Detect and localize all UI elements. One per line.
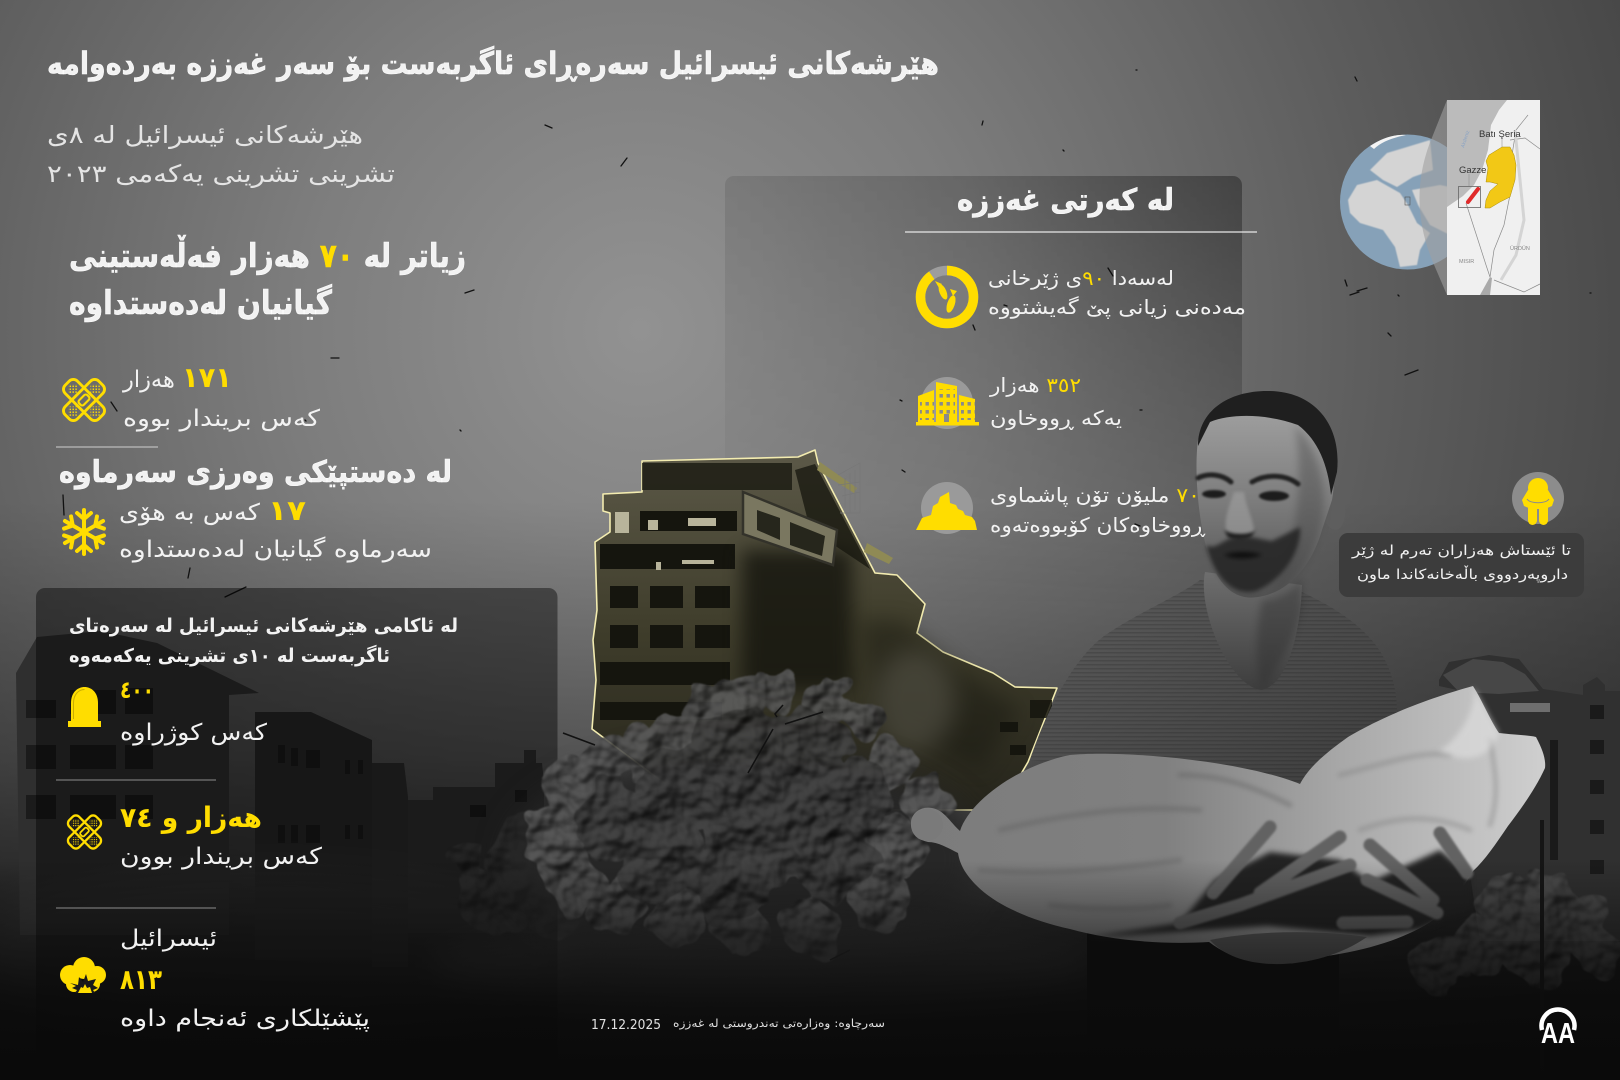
title: هێرشەکانی ئیسرائیل سەرەڕای ئاگربەست بۆ سەر غەززە بەردەوامە bbox=[47, 45, 939, 82]
subtitle bbox=[47, 121, 395, 188]
stat: 813 violations: پێشێلکاری ئەنجام داوە bbox=[120, 1006, 370, 1032]
panel: Gaza Strip bbox=[725, 176, 1242, 494]
stat: 17 deaths from cold: سەرماوە گیانیان لەدەستداوە bbox=[119, 536, 432, 563]
inset map bbox=[1447, 100, 1540, 295]
footer date: 17.12.2025 bbox=[591, 1017, 661, 1033]
heading: deaths bbox=[69, 235, 466, 323]
stat: 400 killed bbox=[68, 676, 267, 746]
distant smoke bbox=[1412, 868, 1620, 993]
shirt bbox=[1030, 580, 1397, 795]
stat: 1074 wounded: کەس بریندار بوون bbox=[120, 844, 322, 870]
icon: buildings bbox=[916, 377, 979, 429]
ground fog bbox=[430, 920, 1090, 1010]
subtitle: هێرشەکانی ئیسرائیل لە ٨ی bbox=[47, 121, 363, 149]
globe bbox=[1340, 134, 1475, 270]
heading: Gaza Strip: لە کەرتی غەززە bbox=[957, 183, 1174, 218]
stat: 17 deaths from cold bbox=[61, 494, 432, 563]
bottom ground darkening bbox=[0, 860, 1620, 1080]
debris in cloud bbox=[563, 705, 850, 960]
map labels: Akdeniz bbox=[1460, 129, 1472, 149]
face bbox=[1196, 402, 1334, 598]
stat: 400 killed: کەس کوژراوە bbox=[120, 720, 267, 746]
ruined building on the right bbox=[1412, 655, 1620, 1080]
panel: Israeli attacks since ceasefire bbox=[36, 588, 558, 1080]
logo: AA bbox=[1541, 1009, 1575, 1050]
stat: wounded 171 thousand: کەس بریندار بووە bbox=[123, 406, 320, 432]
icon: bandage bbox=[61, 377, 107, 423]
stat: 813 violations bbox=[60, 926, 370, 1032]
brows and eyes bbox=[1198, 475, 1298, 501]
stat: 90 percent infrastructure bbox=[920, 266, 1246, 324]
man holding shroud bbox=[911, 391, 1545, 1080]
icon: bandage small bbox=[66, 814, 103, 850]
beard and mouth bbox=[1206, 527, 1300, 592]
subtitle: تشرینی تشرینی یەکەمی ٢٠٢٣ bbox=[47, 160, 395, 188]
icon: explosion cloud bbox=[60, 957, 106, 993]
map labels: Batı Şeria bbox=[1479, 129, 1521, 140]
west bank bbox=[1485, 147, 1516, 208]
stat: 352 thousand units bbox=[916, 373, 1122, 430]
icon: rubble bbox=[916, 482, 977, 534]
shroud bbox=[911, 686, 1545, 962]
stat: 1074 wounded: هەزار و ٧٤ bbox=[120, 801, 262, 834]
heading: start of winter: لە دەستپێکی وەرزی سەرماوە bbox=[59, 455, 452, 490]
callout: bodies under rubble bbox=[1339, 533, 1584, 597]
stat: 17 deaths from cold: ١٧ کەس بە هۆی bbox=[119, 494, 306, 527]
ear bbox=[1318, 483, 1348, 531]
nose bbox=[1224, 492, 1256, 539]
hair bbox=[1198, 391, 1338, 495]
icon: snowflake bbox=[61, 510, 107, 554]
stat: 352 thousand units: ٣٥٢ هەزار bbox=[989, 373, 1081, 397]
funnel bbox=[1419, 100, 1447, 295]
map labels: Gazze bbox=[1459, 165, 1486, 176]
stat: 400 killed: ٤٠٠ bbox=[120, 676, 154, 704]
hands bbox=[1085, 827, 1470, 938]
panel heading: since ceasefire: لە ئاکامی هێرشەکانی ئیسرائیل لە سەرەتای bbox=[69, 615, 458, 637]
icon: person under rubble bbox=[1512, 472, 1564, 525]
lower shroud bbox=[1210, 932, 1367, 964]
torso bbox=[1087, 930, 1339, 1080]
panel heading: since ceasefire: ئاگربەست لە ١٠ی تشرینی یەکەمەوە bbox=[69, 644, 390, 667]
dust cloud bbox=[510, 666, 980, 970]
stat: 813 violations: ٨١٣ bbox=[120, 963, 162, 996]
callout: bodies under rubble: داروپەردووی باڵەخانەکاندا ماون bbox=[1357, 565, 1568, 583]
stat: 70 million tons of rubble bbox=[916, 482, 1206, 537]
map labels: ÜRDÜN bbox=[1510, 245, 1530, 252]
flying debris specks bbox=[63, 70, 1591, 643]
stat: wounded 171 thousand bbox=[61, 361, 320, 432]
stat: 70 million tons of rubble: ٧٠ ملیۆن تۆن پاشماوی bbox=[990, 483, 1200, 508]
stat: 813 violations: ئیسرائیل bbox=[120, 926, 217, 952]
icon: bomb donut bbox=[920, 270, 974, 324]
map labels: MISIR bbox=[1459, 259, 1474, 265]
stat: 70 million tons of rubble: ڕووخاوەکان کۆبووەتەوە bbox=[990, 513, 1206, 537]
building light details bbox=[615, 512, 716, 570]
heading: deaths: زیاتر لە ٧٠ هەزار فەڵەستینی bbox=[69, 235, 466, 276]
panel heading: since ceasefire bbox=[69, 615, 458, 667]
icon: gravestone bbox=[68, 687, 101, 727]
collapsing building bbox=[592, 450, 1057, 810]
stat: wounded 171 thousand: ١٧١ هەزار bbox=[122, 361, 232, 394]
map locator bbox=[1340, 100, 1540, 295]
stat: 90 percent infrastructure: لەسەدا ٩٠ی ژێرخانی bbox=[988, 266, 1174, 290]
stat: 352 thousand units: یەکە ڕووخاون bbox=[990, 406, 1122, 430]
callout: bodies under rubble: تا ئێستاش هەزاران تەرم لە ژێر bbox=[1351, 543, 1571, 559]
map labels bbox=[1459, 129, 1530, 265]
heading: deaths: گیانیان لەدەستداوە bbox=[69, 283, 333, 323]
smoke behind left panel bbox=[452, 812, 600, 940]
shroud folds bbox=[980, 740, 1496, 909]
scaffold bbox=[838, 463, 860, 513]
footer source: سەرچاوە: وەزارەتی تەندروستی لە غەززە bbox=[673, 1017, 885, 1030]
stat: 90 percent infrastructure: مەدەنی زیانی پێ گەیشتووە bbox=[988, 295, 1246, 320]
skyline behind left panel bbox=[16, 631, 544, 967]
logo: AA: AA bbox=[1541, 1018, 1575, 1050]
neck bbox=[1204, 572, 1302, 690]
fog over skyline bbox=[0, 870, 570, 1030]
gaza bbox=[1468, 189, 1478, 202]
building windows and floors bbox=[600, 463, 1052, 770]
stat: 1074 wounded bbox=[66, 801, 322, 870]
